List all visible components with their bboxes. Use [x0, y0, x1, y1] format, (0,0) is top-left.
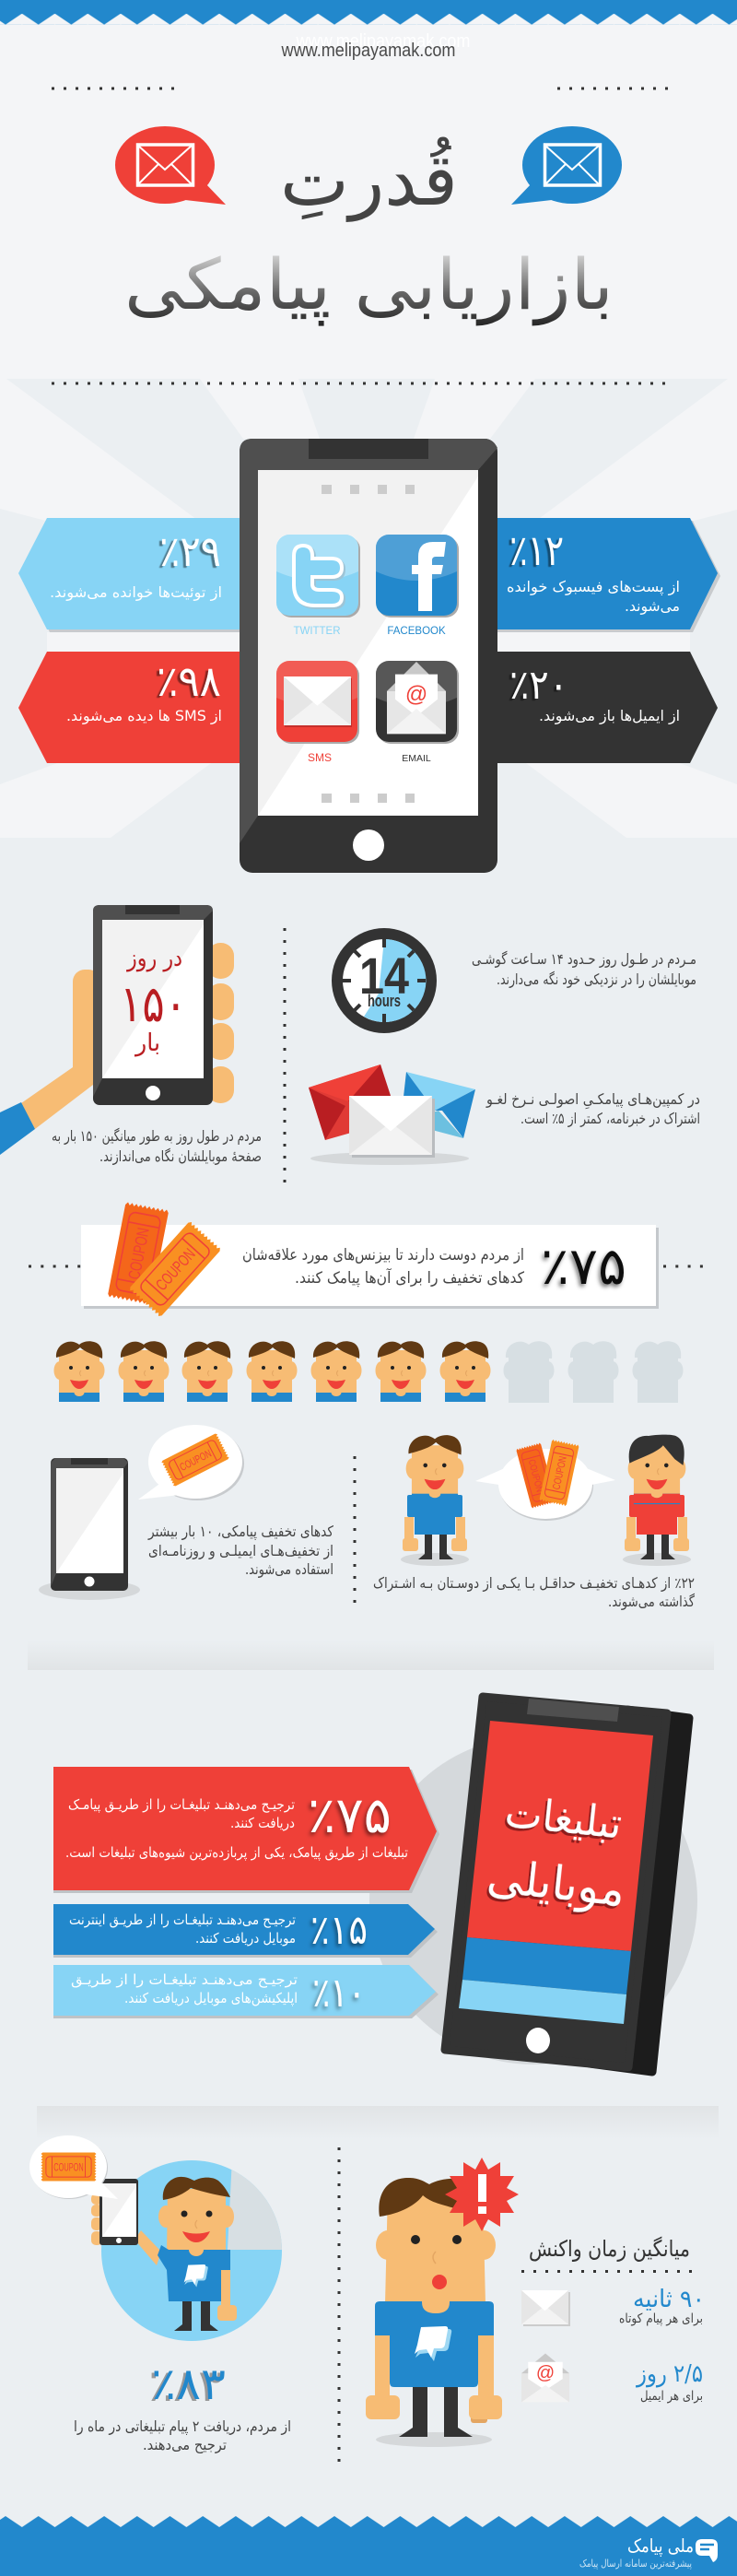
stat: 90 seconds: [619, 2286, 705, 2326]
speech bubble with coupon: [29, 2135, 118, 2199]
stat: 2.5 days: برای هر ایمیل: [640, 2389, 703, 2404]
panel: 15% mobile web arrow: [53, 1904, 438, 1958]
speech bubble: [138, 1425, 244, 1500]
stat: 2.5 days: [635, 2360, 703, 2404]
text: coupon redemption: از تخفیف‌هـای ایمیلـی و روزنامـه‌ای: [148, 1542, 333, 1560]
two friends sharing a coupon: [401, 1435, 691, 1566]
coupon: COUPON: [178, 1447, 214, 1474]
arrow text: ترجیـح می‌دهنـد تبلیغـات را از طریـق اینترنت: [69, 1911, 296, 1928]
footer logo mark: [696, 2539, 718, 2562]
arrow text: دریافت کنند.: [230, 1815, 295, 1831]
header band with zigzag edge: [0, 0, 737, 25]
label: sms: SMS: [308, 751, 332, 764]
phone screen text: 150 times a day: [120, 945, 187, 1057]
arrow text: ترجیـح می‌دهنـد تبلیغـات را از طریـق: [71, 1971, 298, 1988]
arrow text: [65, 1796, 408, 1862]
text: coupon redemption: [147, 1523, 333, 1579]
phone screen text: 150 times a day: بار: [134, 1029, 160, 1057]
heading: average response time: میانگین زمان واکنش: [529, 2236, 690, 2262]
person in red: [625, 1435, 689, 1559]
hand holding phone: [0, 905, 234, 1155]
callout text: از مردم دوست دارند تا بیزنس‌های مورد علاقه‌شان: [242, 1246, 524, 1264]
text: two messages per month: ترجیح می‌دهند.: [143, 2436, 227, 2454]
sms percentage: ٪۹۸: [157, 656, 221, 706]
website url: [281, 31, 470, 61]
text: coupon redemption: کدهای تخفیف پیامکی، ۱۰ بار بیشتر: [147, 1523, 333, 1541]
phone screen text: 150 times a day: ۱۵۰: [120, 974, 187, 1033]
facebook caption: [507, 578, 680, 616]
arrow text: موبایل دریافت کنند.: [195, 1930, 296, 1947]
arrow text: اپلیکیشن‌های موبایل دریافت کنند.: [124, 1990, 298, 2007]
phone title: تبلیغات: [503, 1787, 625, 1849]
stat: 90 seconds: برای هر پیام کوتاه: [619, 2311, 703, 2326]
speech bubble with coupons: COUPON: [526, 1458, 545, 1493]
pictogram row: 7 of 10 faces: [53, 1341, 684, 1403]
text: two messages per month: از مردم، دریافت ۲ پیام تبلیغاتی در ماه را: [74, 2417, 291, 2436]
75 percent figure: ٪۷۵: [541, 1237, 626, 1297]
panel: 75% sms ads arrow: [53, 1767, 439, 1893]
website url: www.melipayamak.com: [281, 41, 455, 61]
panel: email stat arrow: [497, 652, 718, 763]
text: two messages per month: [74, 2417, 291, 2454]
speech bubble with coupons: COUPON: [550, 1455, 569, 1490]
panel: 10% apps arrow: [53, 1965, 439, 2018]
icon: email envelope: @: [536, 2363, 555, 2383]
icon: email app: @: [405, 682, 427, 707]
email percentage: ٪۲۰: [509, 662, 568, 709]
alert badge: [445, 2158, 519, 2231]
stat: 2.5 days: ۲/۵ روز: [635, 2360, 703, 2388]
panel: 75% coupon callout: [81, 1225, 659, 1309]
panel: sms stat arrow: [18, 652, 240, 763]
icon: coupons: [108, 1202, 222, 1318]
facebook percentage: ٪۱۲: [509, 525, 564, 575]
twitter caption: از توئیت‌ها خوانده می‌شوند.: [50, 583, 222, 602]
icon: sms envelope: [521, 2290, 570, 2326]
arrow text: [71, 1971, 298, 2007]
title line two: بازاریابی پیامکی: [124, 243, 614, 326]
phone screen text: 150 times a day: در روز: [125, 945, 182, 972]
text: unsubscribe rate: [485, 1090, 700, 1128]
email caption: از ایمیل‌ها باز می‌شوند.: [539, 707, 680, 725]
83 percent figure: ٪۸۳: [151, 2358, 226, 2410]
label: email: EMAIL: [402, 753, 431, 764]
percentage: ٪۱۵: [310, 1907, 368, 1954]
speech bubble with coupons: [475, 1440, 615, 1521]
text: average glance count: [52, 1127, 262, 1166]
text: 14 hours a day: [472, 950, 696, 989]
panel: twitter stat arrow: [18, 518, 242, 632]
icon: coupons: COUPON: [152, 1244, 199, 1294]
arrow text: [69, 1911, 296, 1947]
text: unsubscribe rate: در کمپین‌هـای پیامکـیِ اصولـی نـرخ لغـو: [485, 1090, 700, 1110]
small phone and fingers: [91, 2179, 138, 2245]
website url: www.melipayamak.com: [296, 31, 470, 52]
text: coupons shared: ٪۲۲ از کدهـای تخفیـف حداقـل بـا یکـی از دوسـتان بـه اشـتراک: [373, 1574, 695, 1593]
label: twitter: TWITTER: [293, 626, 341, 637]
label: facebook: FACEBOOK: [387, 626, 446, 637]
phone with coupon bubble: [39, 1425, 244, 1600]
sunburst rays background: [0, 379, 737, 838]
arrow text: تبلیغات از طریق پیامک، یکی از پربازده‌ترین شیوه‌های تبلیغات است.: [65, 1844, 408, 1862]
icon: coupons: COUPON: [125, 1227, 154, 1281]
footer tagline: پیشرفته‌ترین سامانه ارسال پیامک: [579, 2558, 692, 2570]
icon: blue message bubble: [511, 126, 622, 205]
percentage: ٪۱۰: [312, 1970, 366, 2017]
icon: red message bubble: [115, 126, 226, 205]
panel: facebook stat arrow: [497, 518, 720, 632]
text: 14 hours a day: مـردم در طـول روز حـدود ۱۴ سـاعت گوشـی: [472, 950, 696, 969]
text: coupon redemption: استفاده می‌شوند.: [245, 1560, 333, 1579]
icon: 14 hours clock: hours: [368, 992, 401, 1010]
text: average glance count: مردم در طول روز به طور میانگین ۱۵۰ بار به: [52, 1127, 262, 1146]
text: unsubscribe rate: اشتراک در خبرنامه، کمتر از ۵٪ است.: [521, 1110, 700, 1128]
footer brand: ملی پیامک: [627, 2535, 694, 2558]
text: coupons shared: [373, 1574, 695, 1611]
main phone: [240, 439, 497, 873]
icon: twitter app: [276, 535, 360, 618]
arrow text: ترجیـح می‌دهنـد تبلیغـات را از طریـق پیامـک: [68, 1796, 295, 1814]
phone in hand: [93, 905, 213, 1105]
facebook caption: می‌شوند.: [625, 597, 680, 616]
twitter percentage: ٪۲۹: [159, 526, 221, 576]
icon: email envelope: [521, 2354, 569, 2402]
icon: three envelopes: [309, 1065, 475, 1165]
phone title: [485, 1787, 627, 1917]
surprised person: [366, 2158, 519, 2447]
tilted mobile advertising phone: [369, 1697, 697, 2072]
icon: facebook app: [376, 535, 459, 618]
text: coupons shared: گذاشته می‌شوند.: [608, 1593, 695, 1611]
icon: sms app: [276, 661, 359, 744]
phone title: موبایلی: [485, 1849, 627, 1917]
callout text: [242, 1246, 525, 1288]
percentage: ٪۷۵: [308, 1786, 392, 1844]
person in blue: [403, 1435, 467, 1559]
text: average glance count: صفحهٔ موبایلشان نگاه می‌اندازند.: [99, 1147, 262, 1166]
sms caption: از SMS ها دیده می‌شوند.: [66, 707, 222, 725]
footer band with zigzag edge: [0, 2516, 737, 2576]
title line one: قُدرتِ: [280, 136, 458, 222]
facebook caption: از پست‌های فیسبوک خوانده: [507, 578, 680, 596]
icon: 14 hours clock: 14: [359, 947, 409, 1005]
coupon: [161, 1433, 229, 1487]
icon: 14 hours clock: [332, 928, 437, 1033]
person with phone in blue circle: [29, 2135, 282, 2341]
callout text: کدهای تخفیف را برای آن‌ها پیامک کنند.: [295, 1267, 525, 1288]
stat: 90 seconds: ۹۰ ثانیه: [633, 2286, 705, 2313]
icon: email app: [376, 661, 459, 744]
speech bubble with coupon: COUPON: [53, 2162, 84, 2173]
